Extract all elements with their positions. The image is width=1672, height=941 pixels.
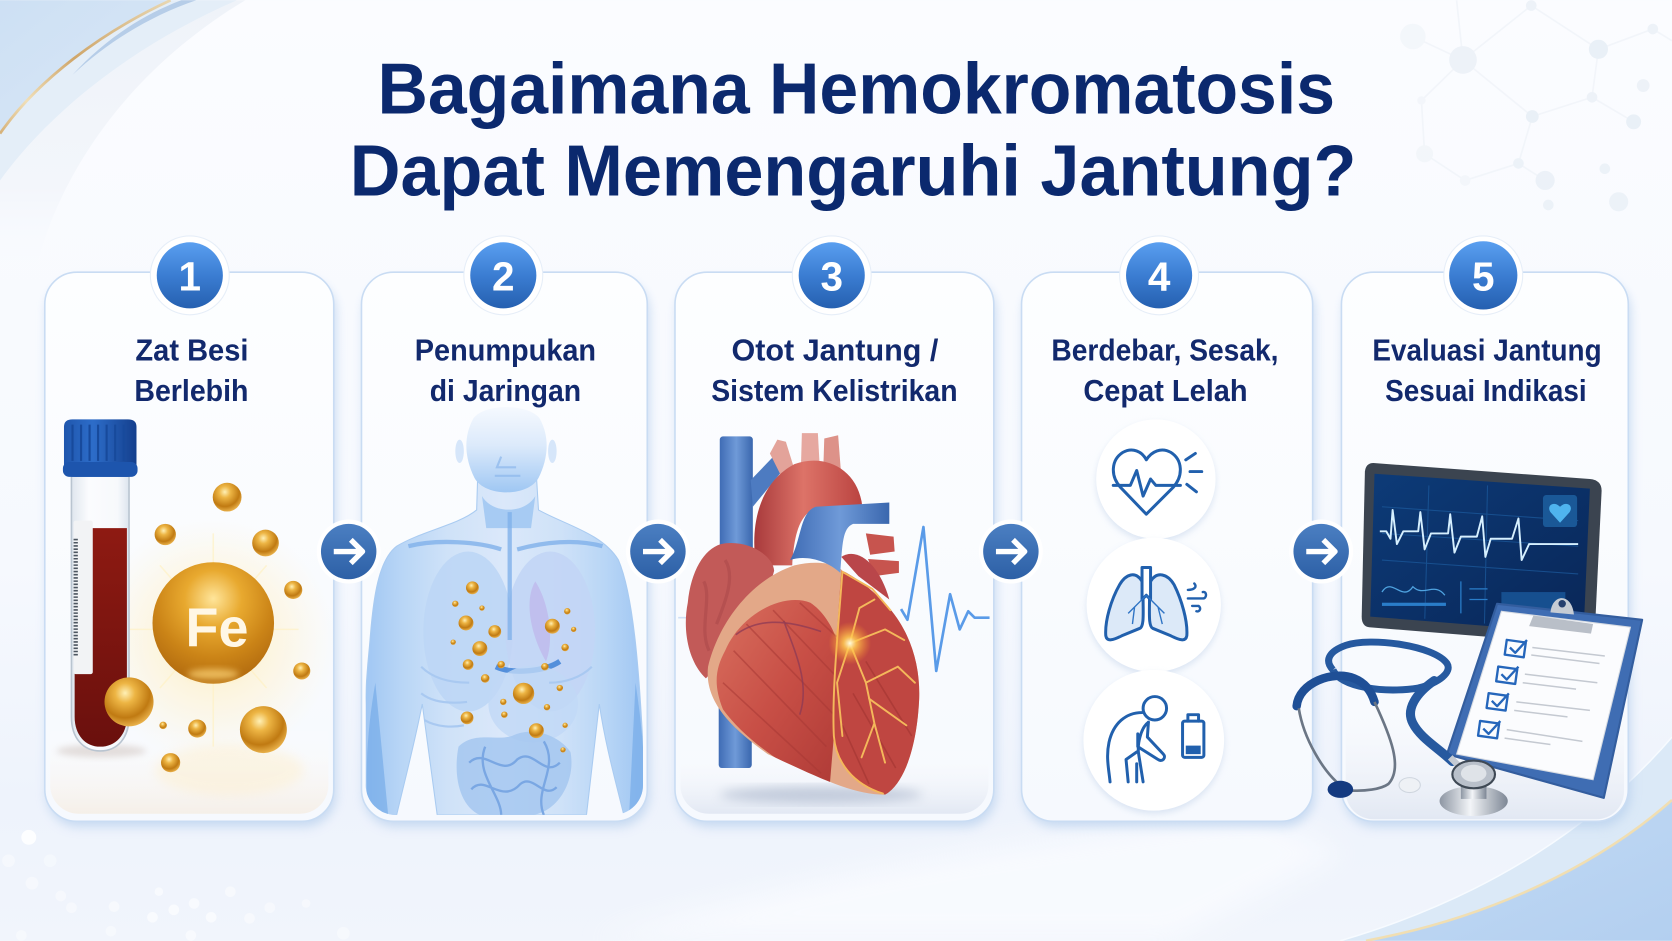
icon: fatigue and low battery xyxy=(1083,670,1224,814)
icon: iron spheres: Fe xyxy=(186,597,248,658)
step 1 badge: 1 xyxy=(179,253,201,299)
title: Dapat Memengaruhi Jantung? xyxy=(350,130,1356,211)
icon: blood tube xyxy=(57,419,146,757)
illustration: heart xyxy=(686,433,928,803)
panel 5 heading xyxy=(1372,333,1602,408)
ecg line xyxy=(678,527,990,671)
step 4 badge: 4 xyxy=(1148,253,1171,299)
panel 1 heading xyxy=(134,333,248,408)
panel 2 heading: di Jaringan xyxy=(430,373,581,408)
title xyxy=(350,48,1356,211)
panel 2: penumpukan di jaringan xyxy=(361,272,649,827)
panel 1 heading: Zat Besi xyxy=(135,333,248,368)
illustration: clipboard xyxy=(1447,598,1642,798)
arrow 3 to 4 xyxy=(979,520,1043,584)
panel 2 heading: Penumpukan xyxy=(415,333,596,368)
iron glow xyxy=(91,517,336,796)
step 2 badge xyxy=(464,236,543,315)
panel 4 heading xyxy=(1051,333,1279,408)
conduction lines xyxy=(833,572,915,794)
arrow 4 to 5 xyxy=(1289,520,1353,584)
step 5 badge xyxy=(1444,236,1523,315)
step 1 badge xyxy=(150,236,229,315)
panel 3 heading: Sistem Kelistrikan xyxy=(711,373,958,408)
illustration: translucent body xyxy=(363,407,645,815)
panel 3: otot jantung xyxy=(675,272,996,827)
step 3 badge: 3 xyxy=(820,253,843,299)
illustration: monitor xyxy=(1362,463,1602,645)
panel 2 heading xyxy=(415,333,596,408)
decorative bokeh dots xyxy=(2,830,350,941)
step 3 badge xyxy=(792,236,871,315)
icon: palpitation heart xyxy=(1096,419,1216,542)
panel 4: gejala xyxy=(1022,272,1315,827)
illustration: stethoscope xyxy=(1297,642,1508,816)
icon: iron spheres xyxy=(104,483,310,772)
step 4 badge xyxy=(1120,236,1199,315)
panel 4 heading: Berdebar, Sesak, xyxy=(1051,333,1279,368)
iron deposits xyxy=(451,581,576,753)
step 2 badge: 2 xyxy=(492,253,515,299)
title: Bagaimana Hemokromatosis xyxy=(377,48,1335,129)
panel 1 heading: Berlebih xyxy=(134,373,248,408)
icon: lungs xyxy=(1087,538,1221,675)
panel 3 heading: Otot Jantung / xyxy=(732,333,939,368)
panel 5: evaluasi jantung xyxy=(1297,272,1642,827)
arrow 2 to 3 xyxy=(626,520,690,584)
panel 5 heading: Sesuai Indikasi xyxy=(1385,373,1587,408)
arrow 1 to 2 xyxy=(317,520,381,584)
panel 5 heading: Evaluasi Jantung xyxy=(1372,333,1602,368)
step 5 badge: 5 xyxy=(1472,253,1495,299)
panel 3 heading xyxy=(711,333,958,408)
decorative molecule pattern xyxy=(1400,0,1672,211)
panel 1: zat besi berlebih xyxy=(45,272,336,827)
panel 4 heading: Cepat Lelah xyxy=(1083,373,1248,408)
